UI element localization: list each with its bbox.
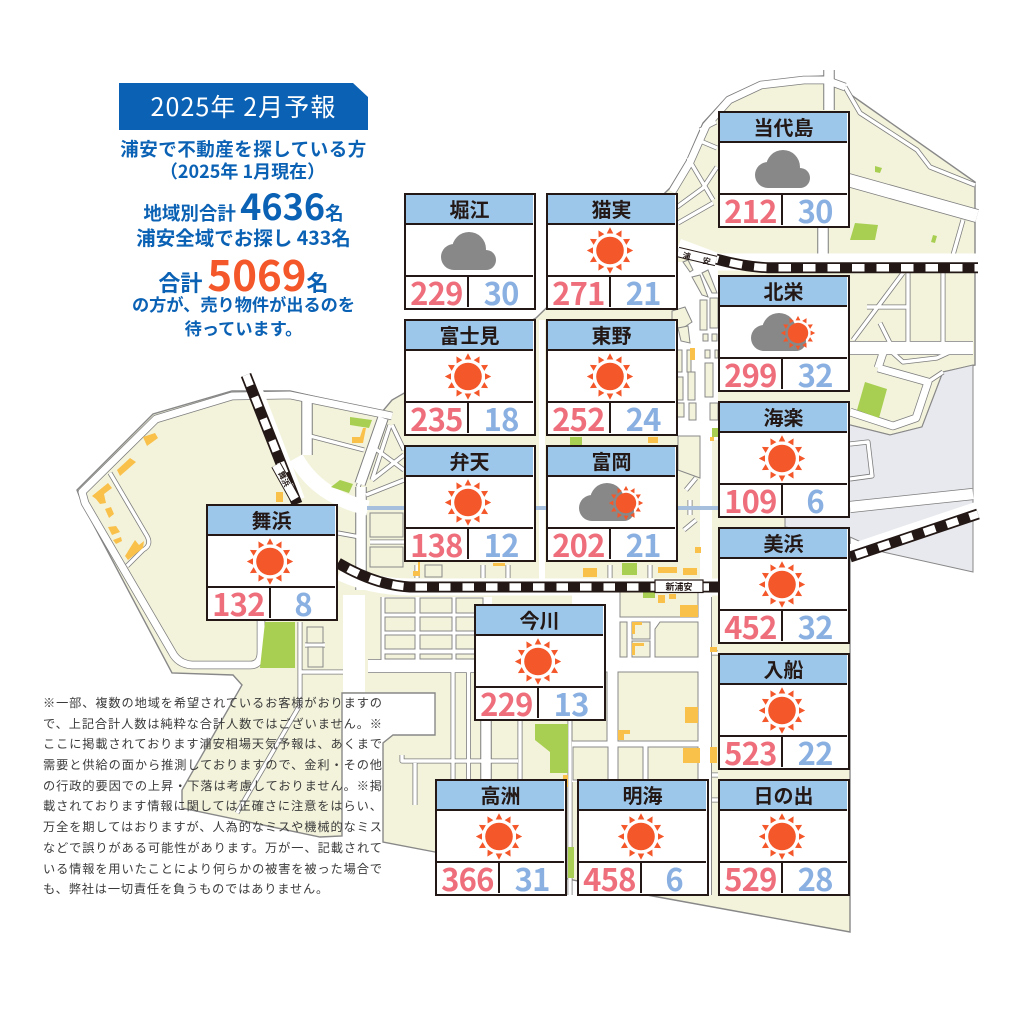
- card: 猫実: [546, 193, 678, 310]
- disclaimer note: で、上記合計人数は純粋な合計人数ではございません。※: [43, 714, 382, 732]
- card: 高洲: [435, 779, 567, 896]
- parks: [260, 166, 937, 878]
- card: 今川: [474, 604, 606, 721]
- card: 北栄: 32: [798, 351, 833, 396]
- card: 当代島: 212: [724, 187, 777, 232]
- card: 入船: [718, 653, 850, 770]
- card: 東野: 252: [552, 395, 605, 440]
- card: 東野: 東野: [592, 320, 632, 349]
- bay area: [785, 365, 973, 572]
- disclaimer note: も、弊社は一切責任を負うものではありません。: [43, 879, 329, 897]
- card: 舞浜: 8: [294, 580, 312, 625]
- card: 猫実: 猫実: [592, 194, 632, 223]
- disclaimer note: 載されております情報に関しては正確さに注意をはらい、: [43, 796, 382, 814]
- card: 高洲: 高洲: [480, 780, 520, 809]
- card: 美浜: 452: [724, 603, 777, 648]
- disclaimer note: 万全を期してはおりますが、人為的なミスや機械的なミス: [43, 817, 382, 835]
- card: 明海: [577, 779, 709, 896]
- card: 富士見: [404, 319, 536, 436]
- card: 堀江: [404, 193, 536, 310]
- disclaimer note: の行政的要因での上昇・下落は考慮しておりません。※掲: [43, 776, 382, 794]
- card: 堀江: 30: [484, 269, 519, 314]
- card: 海楽: 6: [806, 477, 824, 522]
- station label: 新浦安: [655, 580, 703, 593]
- card: 美浜: 美浜: [764, 528, 804, 557]
- text: closing line: の方が、売り物件が出るのを: [132, 291, 355, 316]
- card: 高洲: 366: [441, 855, 494, 900]
- card: 海楽: 109: [724, 477, 777, 522]
- canal: [367, 506, 718, 510]
- station label: 舞浜: [275, 465, 295, 499]
- text: city-wide seekers: 浦安全域でお探し 433名: [136, 222, 351, 251]
- card: 今川: 13: [554, 680, 589, 725]
- land: [77, 76, 975, 932]
- card: 入船: 523: [724, 729, 777, 774]
- disclaimer note: 需要と供給の面から推測しておりますので、金利・その他: [43, 755, 382, 773]
- card: 当代島: [718, 111, 850, 228]
- station label: 浦安: 安: [701, 255, 712, 268]
- card: 東野: 24: [626, 395, 661, 440]
- station label: 舞浜: 舞浜: [275, 469, 292, 489]
- text: grand total: 合計 5069名: [158, 243, 329, 304]
- card: 日の出: [718, 779, 850, 896]
- card: 北栄: [718, 275, 850, 392]
- city blocks: [307, 260, 718, 780]
- card: 今川: 今川: [520, 605, 560, 634]
- disclaimer note: などで誤りがある可能性があります。万が一、記載されて: [43, 838, 382, 856]
- card: 高洲: 31: [515, 855, 550, 900]
- card: 海楽: 海楽: [764, 402, 804, 431]
- card: 弁天: 138: [410, 521, 463, 566]
- card: 弁天: 弁天: [450, 446, 490, 475]
- card: 入船: 入船: [764, 654, 804, 683]
- card: 富士見: 富士見: [440, 320, 500, 349]
- text: as-of date: （2025年 1月現在）: [160, 158, 325, 184]
- card: 今川: 229: [480, 680, 533, 725]
- card: 舞浜: 舞浜: [252, 505, 292, 534]
- card: 弁天: [404, 445, 536, 562]
- card: 入船: 22: [798, 729, 833, 774]
- card: 当代島: 当代島: [754, 112, 814, 141]
- card: 明海: 458: [583, 855, 636, 900]
- card: 富岡: [546, 445, 678, 562]
- railway: Keiyo line: [246, 259, 978, 587]
- card: 猫実: 21: [626, 269, 661, 314]
- text: audience: 浦安で不動産を探している方: [120, 136, 367, 162]
- card: 明海: 明海: [622, 780, 662, 809]
- card: 富岡: 富岡: [592, 446, 632, 475]
- text: closing line: 待っています。: [185, 315, 302, 340]
- card: 堀江: 堀江: [450, 194, 490, 223]
- text: regional total: 地域別合計 4636名: [143, 179, 344, 231]
- text: closing line: [132, 291, 355, 340]
- card: 弁天: 12: [484, 521, 519, 566]
- card: 舞浜: [206, 504, 338, 621]
- card: 日の出: 529: [724, 855, 777, 900]
- card: 富岡: 202: [552, 521, 605, 566]
- title banner: 2025年 2月予報: [150, 88, 336, 124]
- card: 美浜: [718, 527, 850, 644]
- card: 富士見: 18: [484, 395, 519, 440]
- disclaimer note: ※一部、複数の地域を希望されているお客様がおりますの: [43, 693, 382, 711]
- card: 富岡: 21: [626, 521, 661, 566]
- station label: 浦安: 浦: [681, 250, 692, 263]
- card: 日の出: 日の出: [754, 780, 814, 809]
- card: 東野: [546, 319, 678, 436]
- card: 美浜: 32: [798, 603, 833, 648]
- card: 北栄: 299: [724, 351, 777, 396]
- road network: [82, 70, 978, 895]
- white street blocks: [381, 255, 718, 895]
- card: 舞浜: 132: [212, 580, 265, 625]
- disclaimer note: [43, 693, 382, 897]
- buildings: [92, 348, 717, 787]
- station label: 浦安: [678, 250, 716, 268]
- card: 当代島: 30: [798, 187, 833, 232]
- card: 明海: 6: [665, 855, 683, 900]
- disclaimer note: いる情報を用いたことにより何らかの被害を被った場合で: [43, 858, 382, 876]
- card: 北栄: 北栄: [764, 276, 804, 305]
- station label: 新浦安: 新浦安: [665, 580, 693, 593]
- card: 堀江: 229: [410, 269, 463, 314]
- title banner: [119, 83, 368, 130]
- card: 海楽: [718, 401, 850, 518]
- card: 猫実: 271: [552, 269, 605, 314]
- card: 日の出: 28: [798, 855, 833, 900]
- disclaimer note: ここに掲載されております浦安相場天気予報は、あくまで: [43, 734, 382, 752]
- card: 富士見: 235: [410, 395, 463, 440]
